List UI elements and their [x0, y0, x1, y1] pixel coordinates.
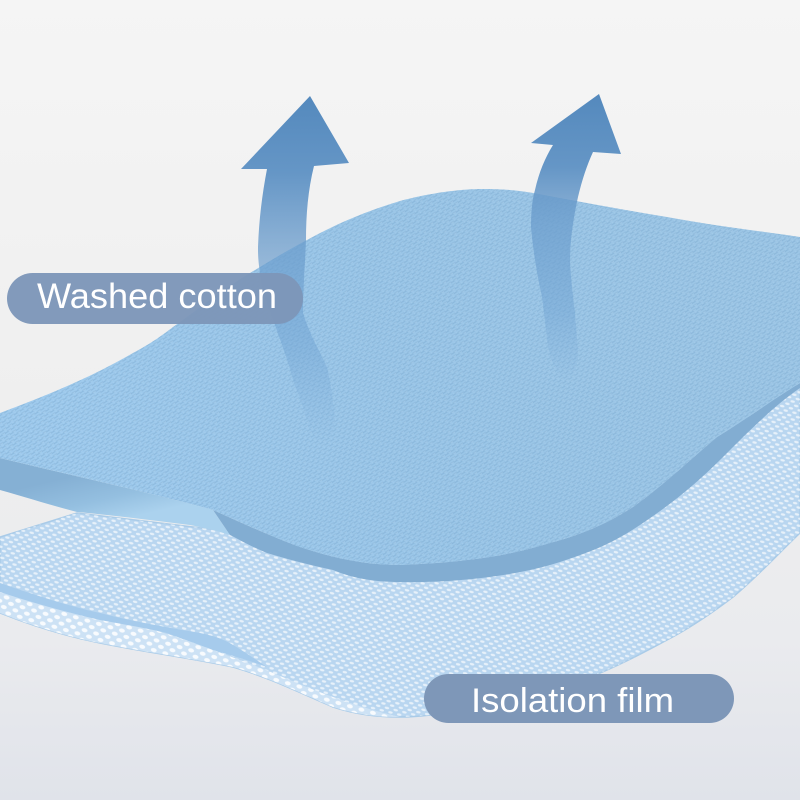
label: Isolation film	[424, 674, 734, 723]
label: Washed cotton: Washed cotton	[37, 277, 277, 316]
mesh fold	[0, 583, 267, 667]
panel: washed cotton layer	[0, 180, 800, 582]
mesh sheet	[0, 385, 800, 717]
cotton side edge: left gathered part	[0, 458, 230, 535]
arrow: left airflow	[241, 96, 349, 447]
arrow: right airflow	[531, 94, 621, 382]
cotton side edge: curved band	[213, 383, 800, 582]
label: Isolation film: Isolation film	[471, 682, 674, 720]
panel: isolation film mesh layer	[0, 385, 800, 717]
mesh lower lip	[0, 590, 400, 717]
mesh dot texture	[0, 385, 800, 717]
cotton top face	[0, 180, 800, 580]
mesh lip dots	[0, 590, 400, 717]
label: Washed cotton	[7, 273, 303, 324]
